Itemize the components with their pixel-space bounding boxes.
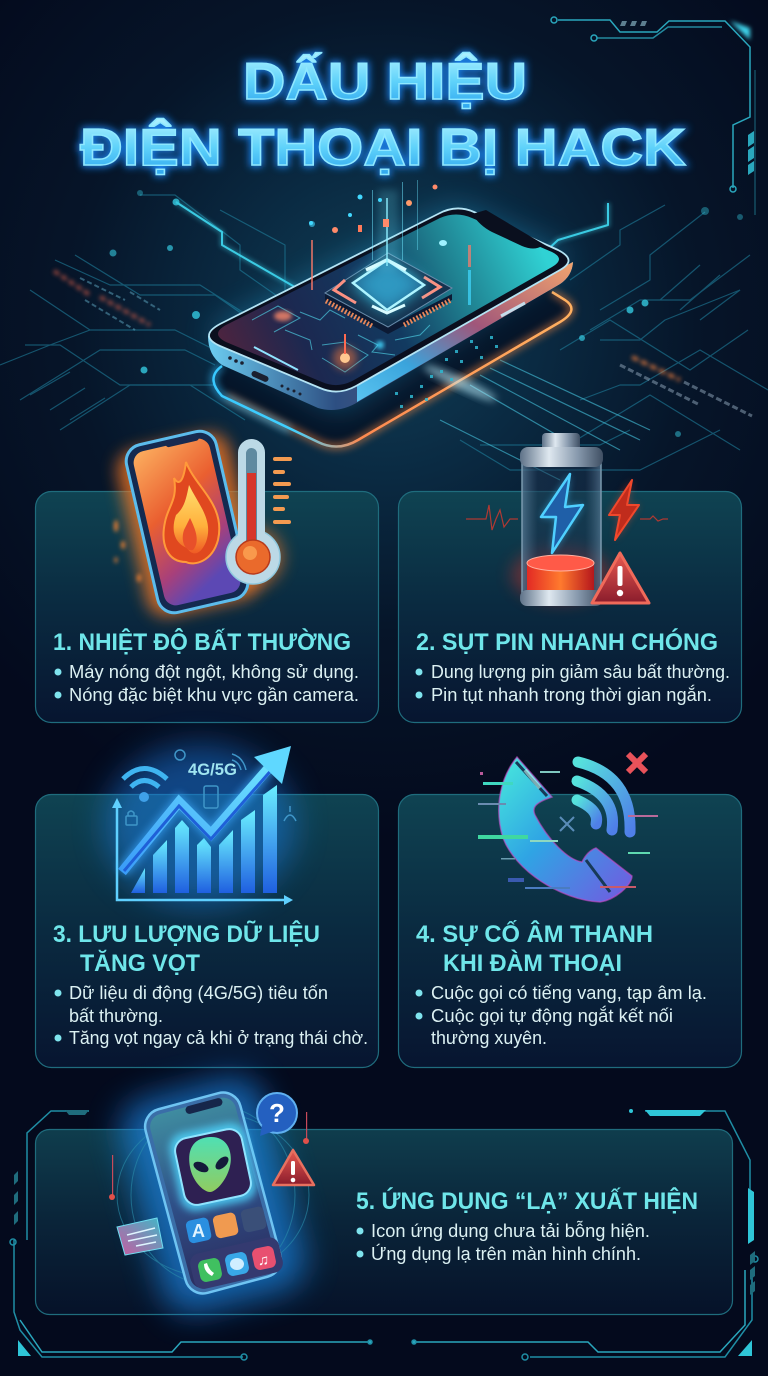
phone notch [472, 210, 550, 248]
battery cap [542, 433, 580, 451]
chip red brackets [334, 280, 356, 303]
icon: glitching handset [478, 754, 658, 902]
4G/5G label: 4G/5G [188, 760, 237, 779]
hot screen [131, 436, 243, 608]
heading: card 3: TĂNG VỌT [80, 949, 200, 977]
heading: card 4: KHI ĐÀM THOẠI [443, 949, 622, 977]
icon: rising data chart [105, 745, 296, 905]
text: card 2 list: Dung lượng pin giảm sâu bất thường. [431, 662, 730, 682]
phone screen [218, 214, 559, 385]
handset highlights [516, 762, 610, 892]
app tiles [185, 1206, 267, 1244]
heading: card 3: 3. LƯU LƯỢNG DỮ LIỆU [53, 920, 320, 948]
heading: card 4: 4. SỰ CỐ ÂM THANH [416, 920, 653, 948]
panel: card 1 [36, 492, 378, 722]
orbit rings [117, 1105, 309, 1285]
dock [188, 1235, 285, 1291]
data readouts [54, 271, 752, 480]
icon: phone with alien app [109, 1070, 314, 1320]
text: card 1 list [54, 662, 359, 705]
red bolt [609, 480, 639, 540]
side button [501, 303, 525, 316]
question bubble [257, 1093, 297, 1136]
alien tile [167, 1120, 259, 1214]
chip pins [326, 301, 372, 326]
chip [325, 253, 452, 334]
sound waves [577, 762, 630, 832]
small tech icons [126, 750, 296, 825]
title line 2: ĐIỆN THOẠI BỊ HACK [80, 118, 686, 177]
home indicator [254, 347, 298, 370]
app tiles: A [192, 1221, 205, 1241]
battery body [522, 462, 601, 594]
panel: card 4 [398, 794, 742, 1068]
phone body [123, 428, 251, 616]
circuit traces [0, 190, 768, 470]
text: card 5 list: Ứng dụng lạ trên màn hình chính. [371, 1243, 641, 1264]
floating bits [309, 184, 447, 246]
heading: card 4 [416, 920, 653, 977]
glitch bars [478, 771, 658, 889]
main phone [208, 180, 573, 410]
pulse lines [466, 505, 668, 530]
text: card 4 list: Cuộc gọi tự động ngắt kết nối [431, 1005, 673, 1026]
panel: card 3 [36, 794, 378, 1068]
error mark [628, 754, 646, 772]
text: card 5 list: Icon ứng dụng chưa tải bỗng hiện. [371, 1220, 650, 1241]
bottom tech frame [10, 1109, 758, 1360]
handset [499, 757, 632, 902]
text: card 1 list: Máy nóng đột ngột, không sử dụng. [69, 662, 359, 682]
text: card 4 list: thường xuyên. [431, 1028, 547, 1048]
warning triangle [592, 553, 649, 603]
title glow: DẤU HIỆU [243, 52, 527, 111]
floating card [117, 1218, 163, 1255]
red charge [527, 563, 594, 590]
phone body and side edges [208, 262, 573, 410]
phone glow [208, 207, 571, 410]
icon: battery [466, 433, 668, 606]
phone body [141, 1089, 285, 1297]
phone rim [209, 208, 569, 392]
text: card 1 list: Nóng đặc biệt khu vực gần camera. [69, 685, 359, 705]
text: card 3 list: bất thường. [69, 1006, 163, 1026]
phone port details [228, 356, 302, 396]
thermometer [226, 530, 280, 584]
text: card 3 list: Tăng vọt ngay cả khi ở trạng thái chờ. [69, 1028, 368, 1048]
panel: card 5 [36, 1130, 732, 1314]
question bubble: ? [269, 1098, 285, 1128]
warning triangle [273, 1150, 314, 1185]
trend arrow [122, 762, 274, 872]
sparks [114, 520, 141, 582]
panel: card 2 [398, 492, 742, 722]
light beams [311, 180, 471, 305]
phone notch [185, 1097, 223, 1115]
screen notch [165, 433, 199, 448]
axes [117, 802, 288, 900]
heading: card 1: 1. NHIỆT ĐỘ BẤT THƯỜNG [53, 628, 351, 656]
phone screen [147, 1095, 279, 1291]
title glow [80, 52, 686, 177]
heading: card 3 [53, 920, 320, 977]
text: card 4 list: Cuộc gọi có tiếng vang, tạp âm lạ. [431, 983, 707, 1003]
text: card 5 list [356, 1220, 650, 1264]
text: card 3 list: Dữ liệu di động (4G/5G) tiêu tốn [69, 983, 328, 1003]
dock: ♫ [258, 1252, 269, 1269]
text: card 2 list: Pin tụt nhanh trong thời gian ngắn. [431, 684, 712, 705]
title [80, 52, 686, 177]
underglow plate [214, 288, 571, 447]
ticks [273, 457, 292, 524]
icon: overheating phone and thermometer [113, 428, 292, 621]
text: card 4 list [416, 983, 707, 1048]
flame [164, 462, 219, 563]
blue bolt [541, 474, 583, 553]
alien head [189, 1137, 231, 1192]
text: card 2 list [416, 662, 730, 705]
heading: card 2: 2. SỤT PIN NHANH CHÓNG [416, 628, 718, 656]
chip glow core [352, 258, 425, 312]
title glow: ĐIỆN THOẠI BỊ HACK [80, 118, 686, 177]
heading: card 5: 5. ỨNG DỤNG “LẠ” XUẤT HIỆN [356, 1187, 698, 1215]
top right tech frame [551, 17, 755, 215]
bars [131, 785, 277, 893]
title line 1: DẤU HIỆU [243, 52, 527, 111]
text: card 3 list [54, 983, 368, 1048]
phone screen circuits [252, 306, 430, 372]
sparks [109, 1112, 309, 1200]
wifi [123, 768, 167, 787]
